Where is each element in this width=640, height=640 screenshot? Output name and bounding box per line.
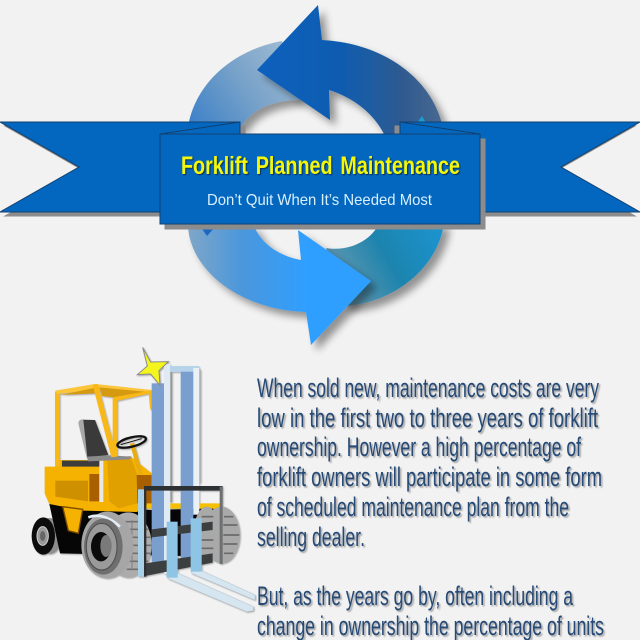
- forklift carriage: [138, 486, 223, 577]
- ribbon left fold: [160, 122, 240, 134]
- ribbon banner: [0, 122, 640, 224]
- paragraph two: [257, 581, 604, 640]
- arc: upper left faded: [188, 41, 300, 128]
- forklift overhead guard: [55, 384, 152, 466]
- forklift mast: [152, 364, 201, 574]
- paragraph one: selling dealer.: [257, 522, 365, 552]
- arrow tip: teal peeking above banner: [412, 116, 430, 130]
- forklift rear tire: [32, 517, 62, 555]
- forklift front tire: [81, 512, 152, 578]
- paragraph one: [257, 373, 602, 552]
- arrow: top dark blue: [257, 5, 444, 136]
- ribbon center panel: [160, 134, 480, 224]
- arc: lower right teal: [326, 222, 444, 306]
- forklift seat: [78, 419, 132, 461]
- forklift illustration: [32, 347, 255, 612]
- forklift star badge: [137, 347, 168, 385]
- ribbon right tail: [400, 122, 640, 212]
- forklift back tire: [193, 507, 240, 563]
- ribbon right fold: [400, 122, 480, 134]
- body text: [257, 373, 604, 640]
- forklift chassis: [49, 504, 213, 557]
- arrow tip: blue peeking below banner: [200, 226, 216, 236]
- arrow: bottom light blue: [188, 226, 371, 345]
- title: Forklift Planned Maintenance: [181, 152, 460, 180]
- subtitle: Don’t Quit When It’s Needed Most: [207, 192, 433, 209]
- ribbon left tail: [0, 122, 240, 212]
- forklift body: [45, 456, 220, 533]
- forklift forks: [167, 518, 255, 612]
- forklift steering wheel: [116, 434, 147, 475]
- cycle arrows ring: [188, 5, 444, 345]
